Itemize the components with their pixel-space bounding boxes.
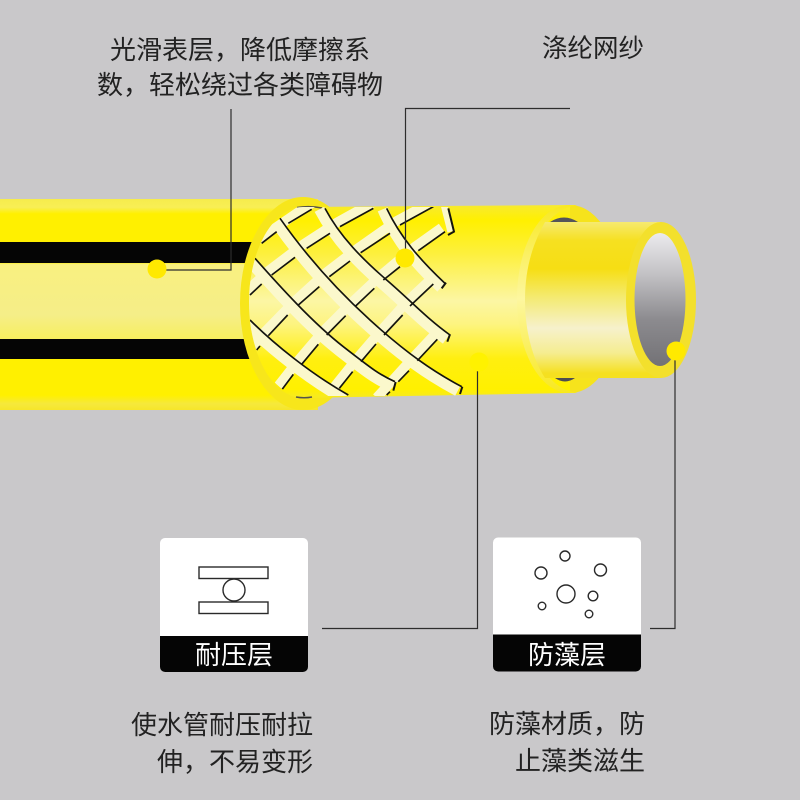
card: pressure layer: [160, 538, 308, 672]
mesh straight black segments: [250, 207, 445, 395]
leader line: [650, 360, 675, 628]
callout text: 光滑表层，降低摩擦系: [110, 35, 370, 65]
marker dot: [396, 248, 414, 268]
callout: anti-algae layer: [650, 342, 686, 628]
text: anti-algae description: 防藻材质，防: [489, 709, 645, 739]
callout text: 涤纶网纱: [542, 35, 644, 63]
marker dot: [666, 342, 686, 360]
mesh straight bands: [237, 199, 442, 398]
marker dot: [470, 352, 488, 372]
mesh curved bands: [246, 209, 458, 399]
text: pressure layer description: 伸，不易变形: [157, 747, 313, 777]
outer layer of hose with black stripes: [0, 199, 318, 410]
card body: [493, 538, 641, 672]
text: anti-algae description: 止藻类滋生: [515, 746, 645, 776]
inner tube: [525, 222, 661, 378]
callout text: [97, 35, 383, 100]
card label bar: [160, 636, 308, 672]
card label: 耐压层: [195, 640, 273, 670]
card label bar: [493, 634, 641, 672]
middle layer rim: [517, 205, 578, 393]
callout: smooth surface: [97, 35, 383, 278]
callout: pressure layer: [322, 352, 488, 628]
inner tube end ring: [626, 222, 696, 378]
text: pressure layer description: 使水管耐压耐拉: [131, 710, 313, 740]
inner tube hole: [634, 233, 686, 366]
card body: [160, 538, 308, 672]
card: anti-algae layer: [493, 538, 641, 672]
dark gap crescents: [550, 218, 578, 382]
card label: 防藻层: [528, 640, 606, 670]
text: pressure layer description: [131, 710, 313, 777]
leader line: [406, 108, 570, 250]
leader line: [322, 370, 478, 628]
icon: bubbles: [535, 551, 606, 618]
mesh curved black lines: [250, 208, 462, 395]
middle layer body: [249, 205, 570, 398]
outer layer cut ring: [240, 197, 366, 410]
icon: pressure plates: [199, 567, 268, 614]
marker dot: [148, 260, 166, 278]
callout text: 数，轻松绕过各类障碍物: [97, 70, 383, 100]
middle layer end ring: [517, 205, 623, 393]
mesh band end ticks: [393, 208, 462, 394]
hose illustration: [0, 197, 696, 410]
text: anti-algae description: [489, 709, 645, 776]
mesh end band: [444, 205, 451, 232]
polyester mesh: [249, 207, 464, 396]
callout: polyester yarn: [396, 35, 644, 268]
leader line: [165, 109, 231, 270]
